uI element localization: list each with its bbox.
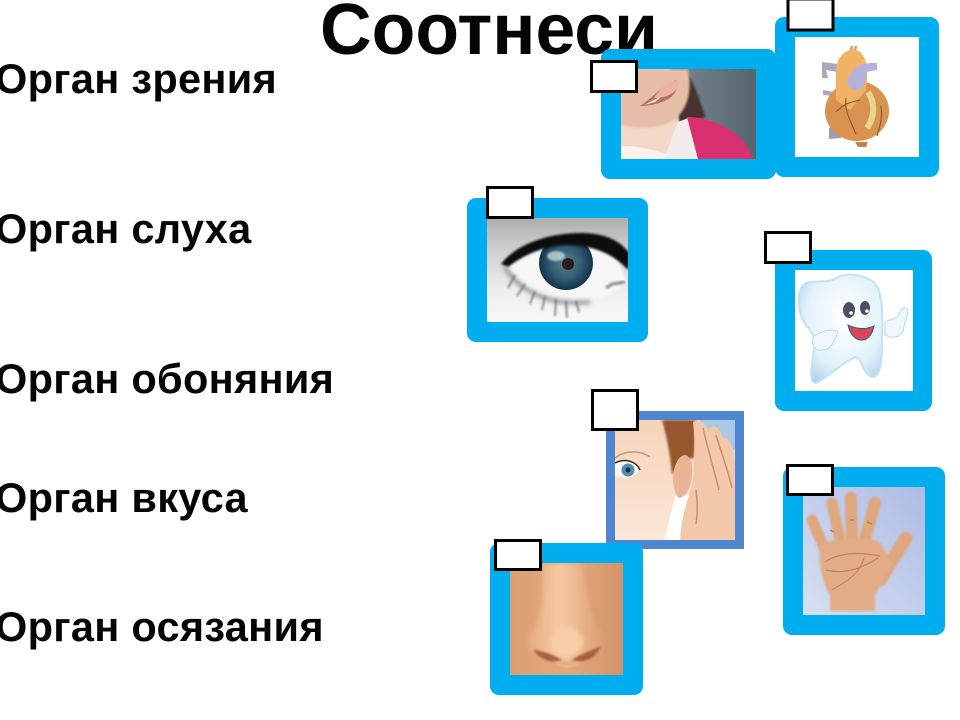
labels list xyxy=(0,55,334,650)
card: mouth photo xyxy=(601,49,776,179)
label: organ of touch: Орган осязания xyxy=(0,603,324,650)
icon: heart xyxy=(822,46,889,147)
answer box: nose xyxy=(496,540,540,570)
label: organ of taste: Орган вкуса xyxy=(0,474,249,521)
card: heart illustration xyxy=(775,17,939,177)
label: organ of hearing: Орган слуха xyxy=(0,205,252,252)
card: tooth illustration xyxy=(775,250,932,411)
answer box: hand xyxy=(788,466,832,494)
answer box: heart xyxy=(788,0,833,30)
card: nose photo xyxy=(490,543,643,695)
icon: tooth xyxy=(799,275,908,383)
answer boxes xyxy=(488,0,833,570)
icon: palm xyxy=(812,498,906,611)
card: hand photo xyxy=(783,467,945,635)
label: organ of smell: Орган обоняния xyxy=(0,355,334,402)
card: eye photo xyxy=(467,198,648,342)
answer box: mouth xyxy=(592,62,636,92)
label: organ of sight: Орган зрения xyxy=(0,55,277,102)
answer box: tooth xyxy=(766,232,810,262)
answer box: ear xyxy=(592,390,638,430)
card: ear photo xyxy=(606,411,744,549)
answer box: eye xyxy=(488,188,532,218)
